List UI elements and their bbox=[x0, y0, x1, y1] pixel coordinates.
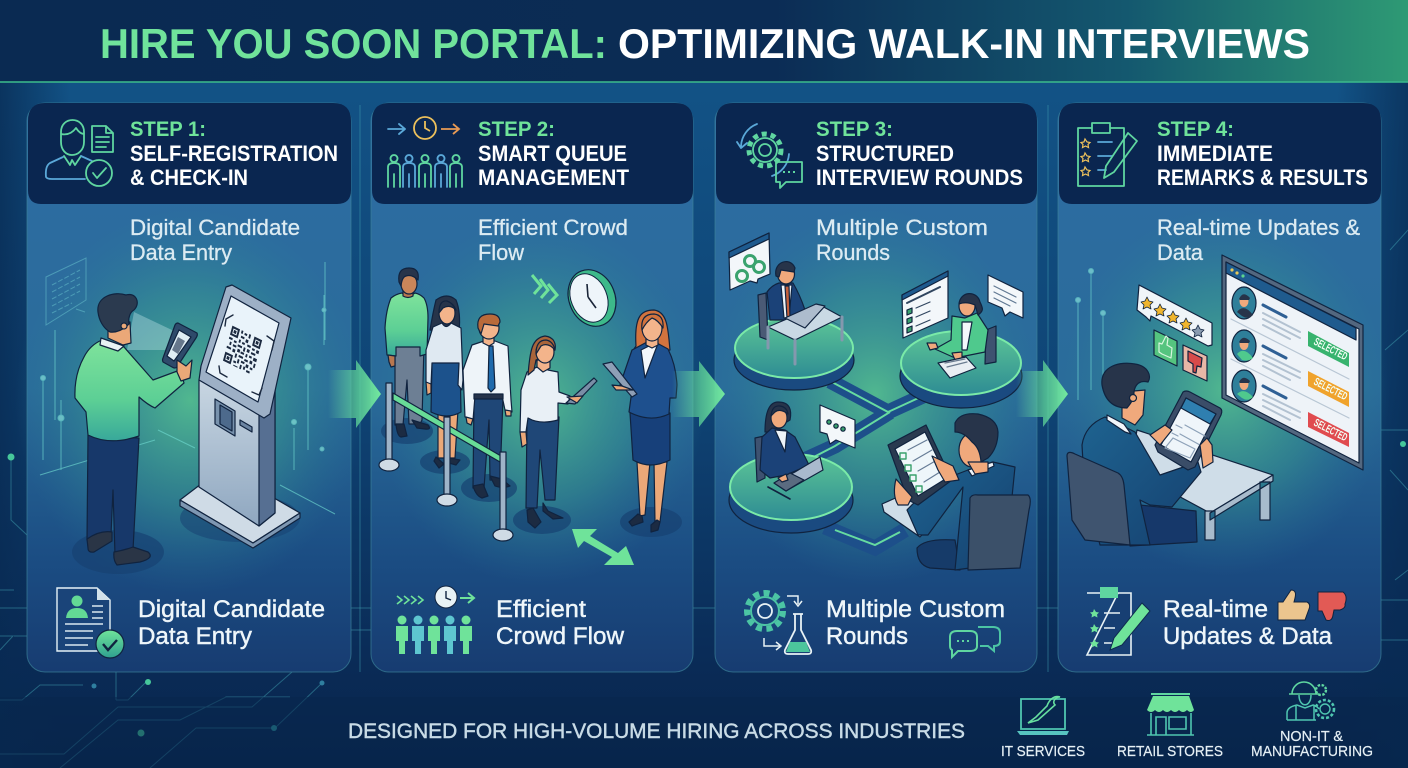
round 2 platform with interviewer bbox=[900, 271, 1023, 408]
candidate in green sweater bbox=[385, 268, 429, 437]
step 3 header: STEP 3: bbox=[816, 118, 893, 141]
connecting paths between rounds bbox=[800, 381, 925, 548]
step 3 footer callout: Rounds bbox=[826, 623, 908, 650]
status badges: SELECTED bbox=[1312, 336, 1349, 363]
step 1 footer callout bbox=[57, 588, 325, 658]
step 1 header: & CHECK-IN bbox=[130, 165, 248, 190]
step 1 header: STEP 1: bbox=[130, 118, 206, 141]
footer caption: DESIGNED FOR HIGH-VOLUME HIRING ACROSS INDUSTRIES bbox=[348, 720, 965, 743]
floating form card bbox=[46, 258, 86, 325]
step 1 subheading bbox=[130, 215, 300, 265]
step 4 header bbox=[1059, 103, 1381, 204]
thumbs up and down bbox=[1154, 330, 1207, 381]
arrow: step 1 to step 2 bbox=[328, 360, 381, 428]
step 4 header: STEP 4: bbox=[1157, 118, 1234, 141]
step 3 header: INTERVIEW ROUNDS bbox=[816, 165, 1023, 190]
step 1 header: SELF-REGISTRATION bbox=[130, 141, 338, 166]
step 2 subheading bbox=[478, 215, 628, 265]
floating checklist card bbox=[902, 271, 948, 338]
step 1 header bbox=[28, 103, 351, 204]
round 1 platform with interviewer bbox=[729, 233, 854, 390]
step 4 subheading: Real-time Updates & bbox=[1157, 215, 1360, 240]
status badges bbox=[1308, 331, 1349, 447]
star rating card bbox=[1137, 285, 1212, 346]
status badges: SELECTED bbox=[1312, 417, 1349, 444]
icon: clipboard and pen bbox=[1078, 123, 1137, 186]
industry: retail stores: RETAIL STORES bbox=[1117, 743, 1223, 760]
icon: clipboard with pen bbox=[1087, 587, 1150, 655]
title bbox=[100, 20, 1310, 67]
floating settings card bbox=[729, 233, 770, 290]
arrow: step 3 to step 4 bbox=[1016, 360, 1068, 427]
industry: IT services bbox=[1001, 697, 1085, 760]
step 3 header: STRUCTURED bbox=[816, 141, 954, 166]
step 2 footer callout: Efficient bbox=[496, 596, 586, 623]
speech bubble bbox=[988, 275, 1023, 318]
icon: candidate with document and check bbox=[46, 120, 113, 186]
step 3 subheading: Rounds bbox=[816, 240, 890, 265]
industry: non-IT and manufacturing: MANUFACTURING bbox=[1251, 743, 1373, 760]
arrow: step 2 to step 3 bbox=[672, 361, 725, 427]
industry: IT services: IT SERVICES bbox=[1001, 743, 1085, 760]
title: HIRE YOU SOON PORTAL: bbox=[100, 20, 607, 67]
candidate in white blouse bbox=[426, 296, 463, 468]
step 2 subheading: Efficient Crowd bbox=[478, 215, 628, 240]
reviewer at desk with tablet bbox=[1067, 363, 1273, 546]
icon: wall clock with chevrons bbox=[532, 262, 624, 334]
icon: candidate document bbox=[57, 588, 124, 658]
results monitor bbox=[1222, 255, 1363, 470]
industry: non-IT and manufacturing bbox=[1251, 682, 1373, 760]
step 4 footer callout: Updates & Data bbox=[1163, 623, 1333, 650]
icon: thumbs up bbox=[1278, 590, 1310, 620]
step 2 header: STEP 2: bbox=[478, 118, 555, 141]
recruiter with tablet bbox=[603, 310, 677, 532]
step 4 subheading bbox=[1157, 215, 1360, 265]
step 3 subheading bbox=[816, 215, 988, 265]
icon: crowd flow bbox=[396, 586, 474, 654]
candidate with tie bbox=[463, 314, 512, 498]
step 4 header: IMMEDIATE bbox=[1157, 141, 1273, 166]
icon: gear with cycle arrows and chat bbox=[737, 124, 802, 188]
candidate rows bbox=[1231, 287, 1349, 420]
industry: retail stores bbox=[1117, 694, 1223, 760]
QR code bbox=[223, 326, 262, 375]
round 3 platform with interviewer bbox=[729, 402, 855, 533]
icon: queue with clock bbox=[388, 117, 462, 187]
step 3 footer callout bbox=[747, 593, 1005, 657]
step 3 header bbox=[716, 103, 1037, 204]
step 2 subheading: Flow bbox=[478, 240, 524, 265]
person scanning QR code bbox=[72, 294, 197, 574]
step 4 footer callout bbox=[1087, 587, 1346, 655]
title: OPTIMIZING WALK-IN INTERVIEWS bbox=[618, 20, 1310, 67]
panel: step 4 bbox=[1058, 103, 1390, 672]
step 1 subheading: Digital Candidate bbox=[130, 215, 300, 240]
icon: thumbs down bbox=[1318, 592, 1346, 620]
step 3 subheading: Multiple Custom bbox=[816, 215, 988, 240]
flow double arrow bbox=[572, 529, 634, 565]
decorative data lines bbox=[40, 262, 335, 514]
candidate with tablet bbox=[520, 336, 597, 528]
step 2 footer callout bbox=[396, 586, 625, 654]
stanchions and rope bbox=[379, 383, 513, 541]
step 2 footer callout: Crowd Flow bbox=[496, 623, 625, 650]
step 2 header: SMART QUEUE bbox=[478, 141, 627, 166]
step 2 header bbox=[372, 103, 693, 204]
step 1 subheading: Data Entry bbox=[130, 240, 232, 265]
step 2 header: MANAGEMENT bbox=[478, 165, 630, 190]
step 1 footer callout: Digital Candidate bbox=[138, 596, 325, 623]
queue of candidates bbox=[381, 268, 682, 537]
step 3 footer callout: Multiple Custom bbox=[826, 596, 1005, 623]
header bar bbox=[0, 0, 1408, 83]
step 4 footer callout: Real-time bbox=[1163, 596, 1268, 623]
panel: step 2 bbox=[371, 103, 705, 672]
evaluator with tablet bbox=[882, 414, 1030, 570]
step 1 footer callout: Data Entry bbox=[138, 623, 252, 650]
footer band bbox=[0, 682, 1408, 768]
step 4 subheading: Data bbox=[1157, 240, 1204, 265]
panel: step 3 bbox=[710, 103, 1040, 672]
icon: chat bubbles bbox=[950, 627, 1000, 657]
decorative data lines bbox=[1076, 268, 1106, 400]
step 4 header: REMARKS & RESULTS bbox=[1157, 165, 1368, 190]
panel: step 1 bbox=[15, 103, 365, 672]
status badges: SELECTED bbox=[1312, 376, 1349, 403]
industry: non-IT and manufacturing: NON-IT & bbox=[1280, 728, 1343, 745]
kiosk illustration bbox=[180, 285, 300, 548]
speech bubble with dots bbox=[820, 405, 855, 448]
icon: gear and flask bbox=[747, 593, 811, 654]
